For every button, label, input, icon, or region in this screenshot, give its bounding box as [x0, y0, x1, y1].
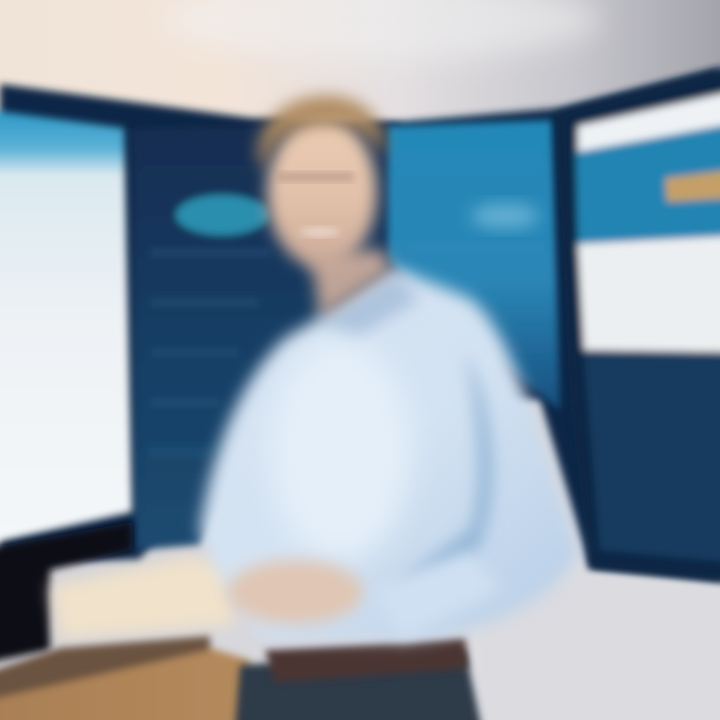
panel: left monitor screen	[0, 110, 132, 544]
forearm cuff	[375, 550, 500, 640]
desk	[50, 556, 235, 640]
lower right wall	[480, 574, 720, 720]
clasped hands	[227, 560, 363, 624]
trousers	[235, 650, 482, 720]
belt	[265, 638, 468, 682]
white header of right screen	[578, 92, 720, 152]
white table on right screen	[578, 236, 720, 352]
shirt highlight	[270, 340, 410, 560]
person	[200, 96, 578, 720]
head	[267, 116, 377, 268]
orange button on right screen	[665, 170, 720, 202]
navy lower area of right screen	[584, 352, 720, 562]
hair	[258, 96, 385, 170]
desk surface	[0, 636, 250, 720]
panel: dark monitor wall frame	[0, 68, 720, 580]
blue band of right screen	[576, 124, 720, 244]
panel: navy centre-left screen	[132, 124, 400, 550]
panel: blue centre-right screen	[388, 120, 560, 410]
shirt torso	[200, 268, 578, 640]
shirt sleeve shadow	[395, 350, 492, 585]
monitor stand	[0, 522, 132, 662]
chart smudge on blue screen	[471, 203, 539, 229]
smile	[300, 227, 340, 237]
collar	[316, 272, 420, 335]
glasses and eyes	[278, 172, 354, 182]
panel: right monitor	[556, 66, 720, 585]
neck	[310, 250, 390, 318]
